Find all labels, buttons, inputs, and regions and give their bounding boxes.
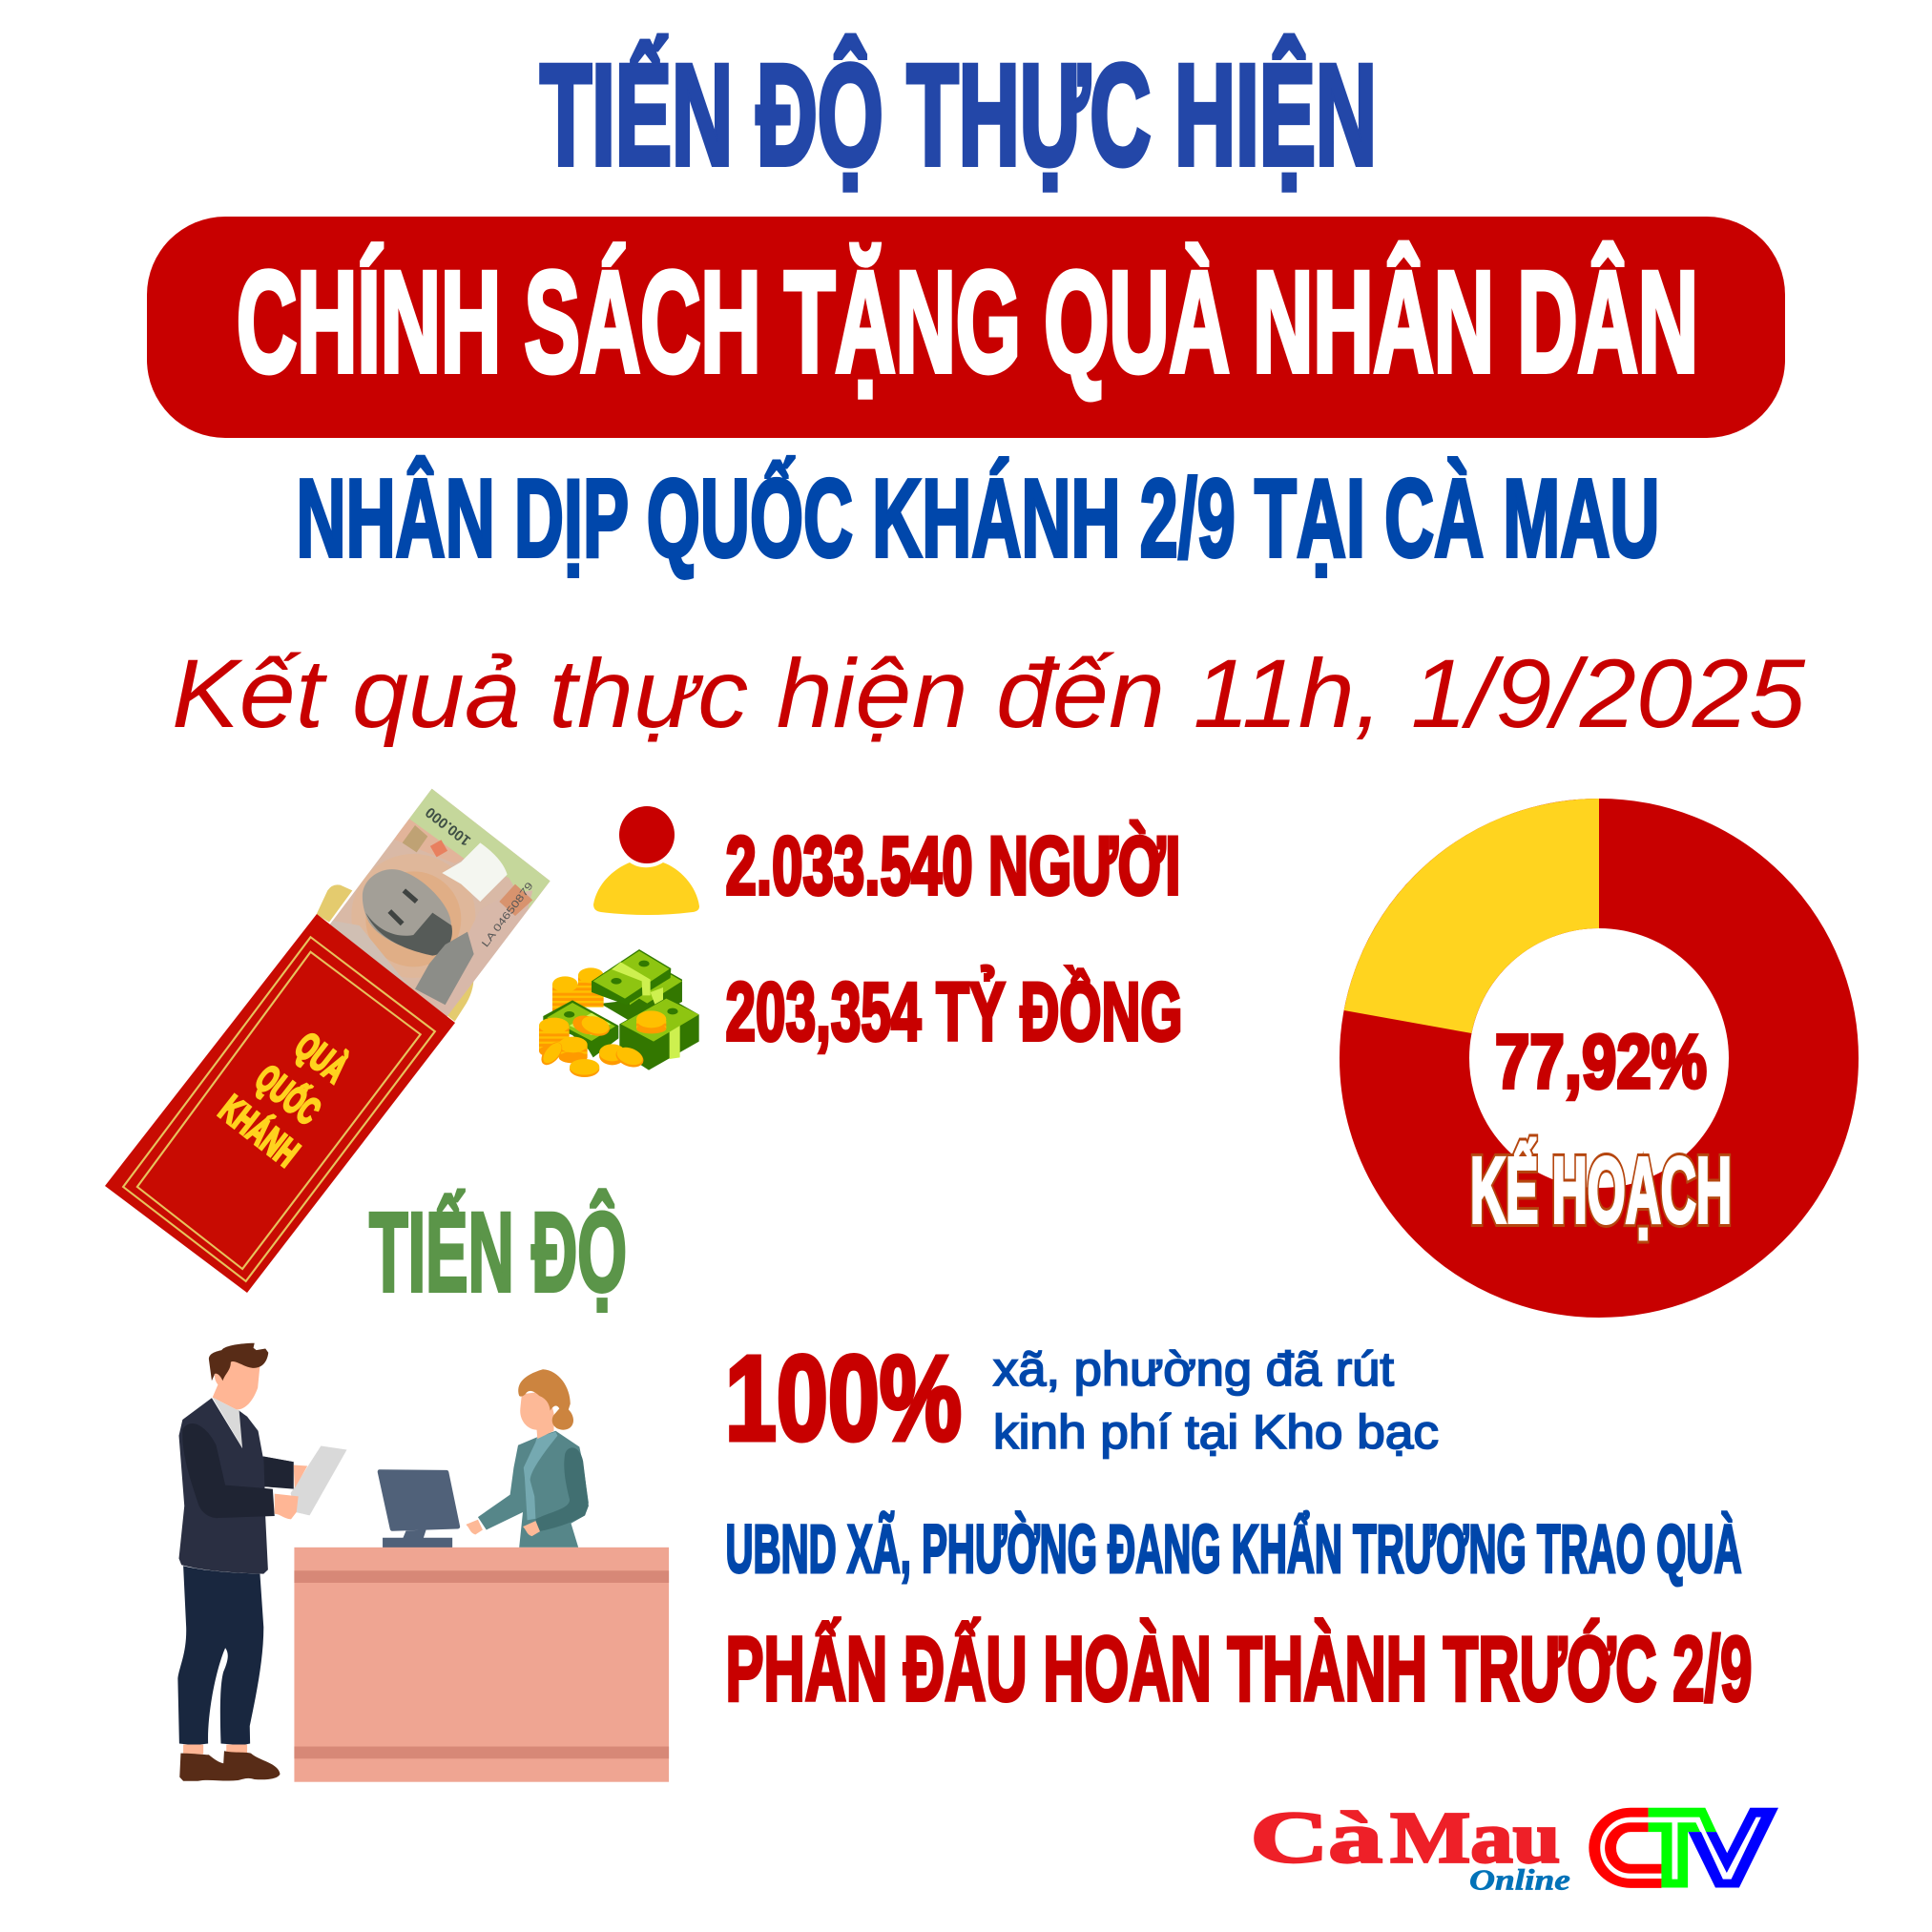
stat description xyxy=(993,1342,1439,1459)
computer monitor xyxy=(378,1469,460,1548)
banknote: LA 04650879 xyxy=(480,881,536,949)
illustration: service counter scene xyxy=(177,1343,669,1782)
people count: 2.033.540 NGƯỜI xyxy=(725,821,1181,912)
plan label xyxy=(1470,1138,1732,1242)
logo: CTV xyxy=(1594,1808,1778,1888)
envelope label: QUỐC xyxy=(247,1056,329,1132)
banknote xyxy=(330,788,550,1017)
icon: person xyxy=(593,806,699,915)
envelope label xyxy=(212,1024,356,1174)
money amount: 203,354 TỶ ĐỒNG xyxy=(725,966,1183,1058)
section heading: progress: TIẾN ĐỘ xyxy=(369,1189,627,1316)
stat description: kinh phí tại Kho bạc xyxy=(993,1405,1439,1459)
envelope body xyxy=(105,914,455,1293)
donut chart: 77,92% of plan xyxy=(1344,799,1794,1253)
logo: Cà Mau Online: Cà xyxy=(1251,1797,1382,1879)
illustration: red envelope with banknote xyxy=(105,785,553,1293)
woman xyxy=(467,1369,589,1548)
percent label: 77,92% xyxy=(1495,1019,1707,1104)
logo: Cà Mau Online xyxy=(1251,1797,1570,1897)
banner: policy name xyxy=(147,217,1785,438)
envelope label: QUÀ xyxy=(287,1024,356,1091)
icon: money and coins xyxy=(537,949,699,1077)
logo: Cà Mau Online: Mau xyxy=(1390,1797,1560,1879)
logo: Cà Mau Online: Online xyxy=(1469,1864,1570,1897)
results date line: Kết quả thực hiện đến 11h, 1/9/2025 xyxy=(172,639,1805,748)
stat description: xã, phường đã rút xyxy=(993,1342,1394,1396)
stat: 100%: 100% xyxy=(725,1331,962,1465)
envelope inner flap xyxy=(317,884,474,1022)
man xyxy=(177,1343,347,1781)
counter desk xyxy=(294,1548,669,1782)
banknote: 100.000 xyxy=(423,803,474,849)
envelope label: KHÁNH xyxy=(212,1087,307,1174)
envelope gold border xyxy=(123,937,435,1281)
title: TIẾN ĐỘ THỰC HIỆN xyxy=(540,34,1377,195)
